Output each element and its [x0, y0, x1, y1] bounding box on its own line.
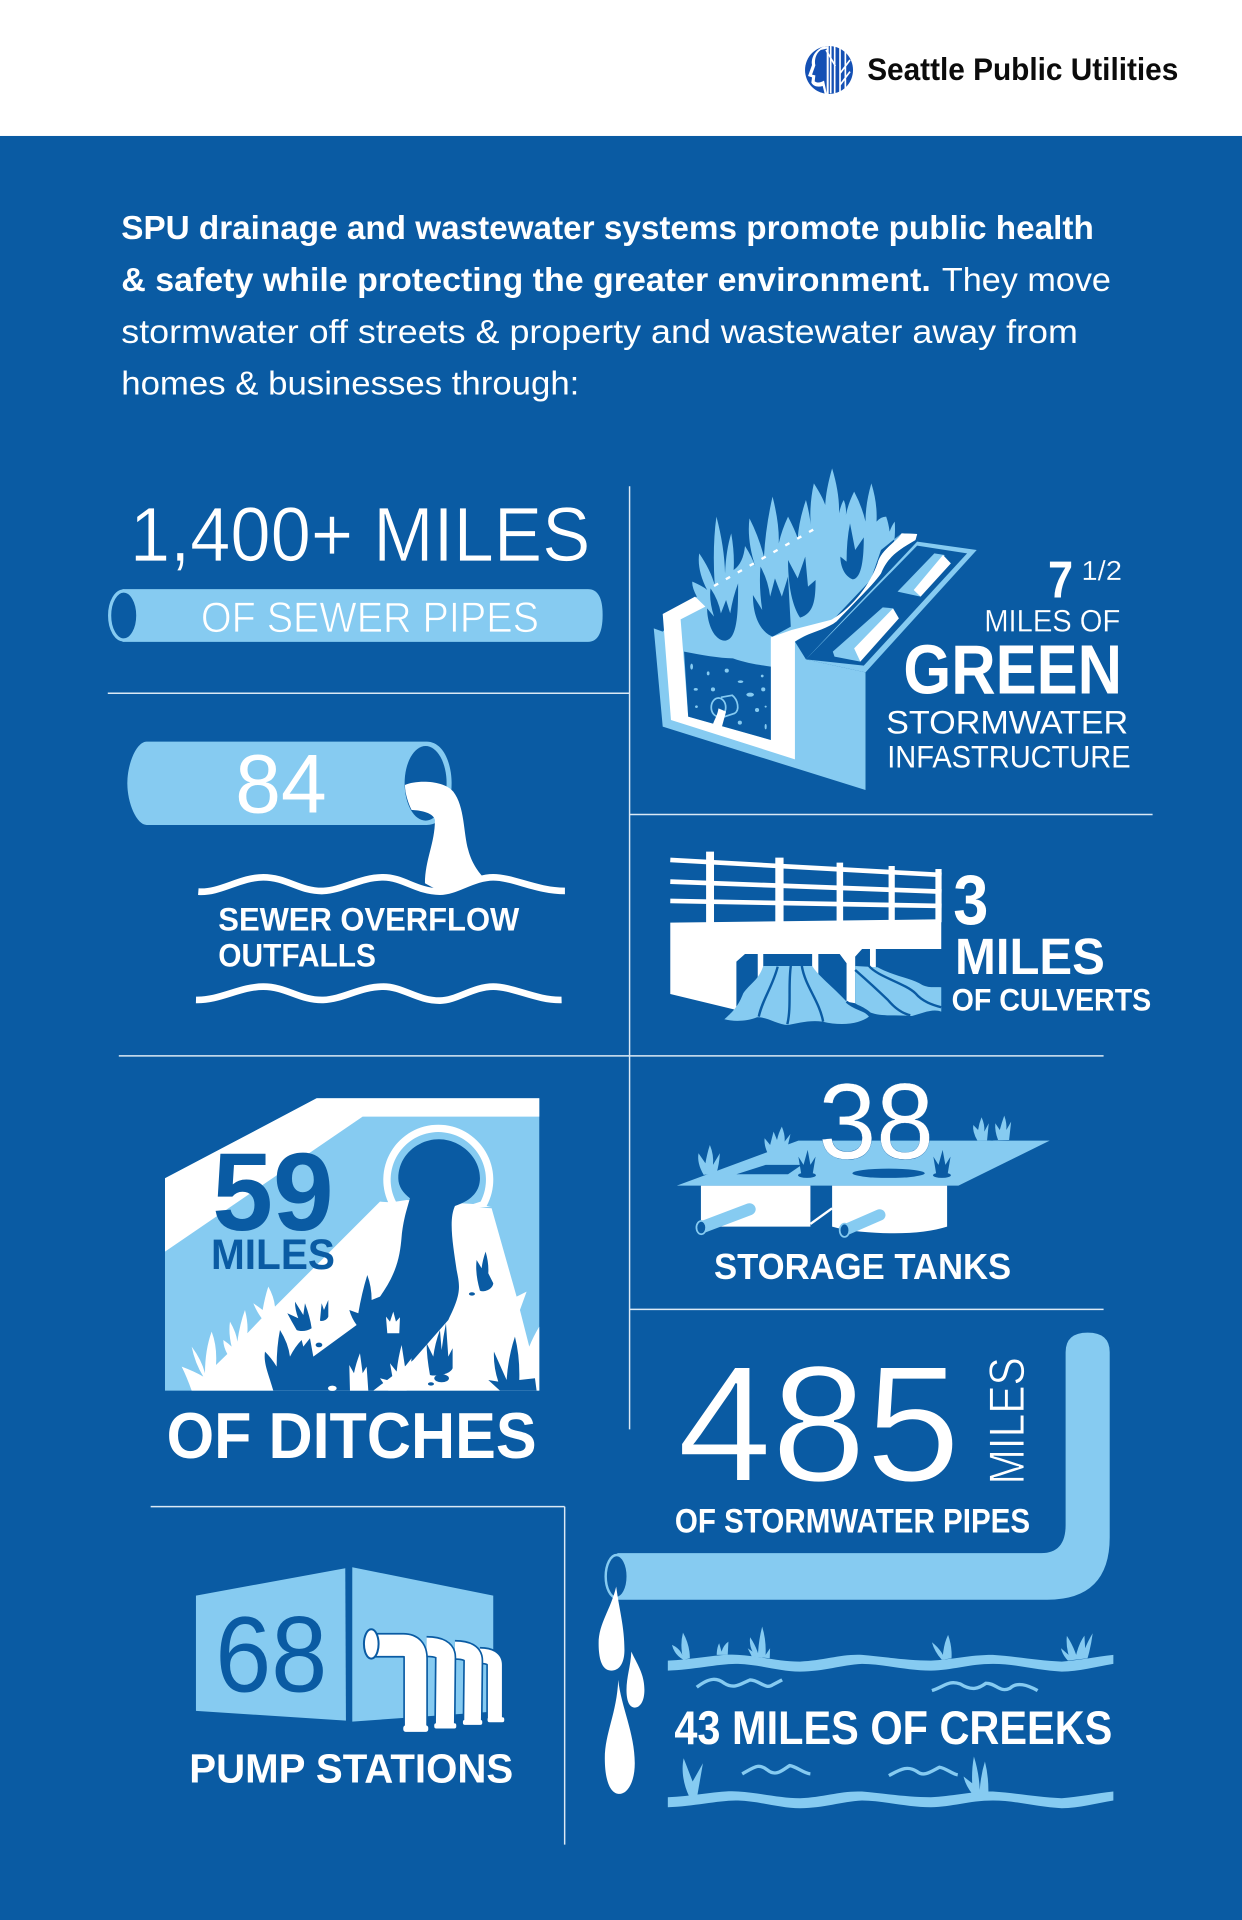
- icon: elbow stormwater pipe: [606, 1333, 1110, 1600]
- intro text: & safety while protecting the greater environment.: [121, 262, 931, 299]
- icon: Seattle seal: [805, 46, 853, 94]
- icon: bioswale cross-section: [654, 468, 977, 790]
- stat: 7 1/2: 7: [1048, 551, 1073, 609]
- panel: culverts and storage tanks: [670, 852, 1151, 1287]
- label: pump stations: PUMP STATIONS: [189, 1746, 513, 1792]
- icon: water drops: [599, 1587, 644, 1794]
- panel: sewer pipes: [110, 492, 603, 642]
- icon: lower creek bank: [668, 1757, 1113, 1808]
- label: 43 miles of creeks: 43 MILES OF CREEKS: [674, 1702, 1112, 1755]
- intro text: SPU drainage and wastewater systems promote public health: [121, 210, 1094, 247]
- pipe opening: [405, 746, 447, 821]
- label: of stormwater pipes: OF STORMWATER PIPES: [675, 1502, 1030, 1540]
- label: miles of: MILES OF: [984, 603, 1120, 639]
- label: sewer overflow outfalls: OUTFALLS: [218, 938, 376, 974]
- icon: pump station building: [196, 1567, 493, 1722]
- icon: upper creek bank: [668, 1627, 1113, 1691]
- stat: 7 1/2: 1/2: [1081, 555, 1122, 587]
- icon: ditch with culvert outfall: [165, 1098, 539, 1391]
- stat: 68: 68: [215, 1595, 327, 1715]
- intro text: They move: [942, 262, 1111, 299]
- icon: culvert bridge: [670, 852, 942, 1025]
- panel: pump stations: [189, 1567, 513, 1792]
- header logo: Seattle Public Utilities: [805, 46, 1178, 94]
- icon: pump pipes: [364, 1629, 504, 1732]
- stat: 3 miles of culverts: OF CULVERTS: [952, 982, 1151, 1018]
- panel: ditches: [165, 1098, 539, 1472]
- intro text: [121, 210, 1111, 402]
- intro text: stormwater off streets & property and wastewater away from: [121, 314, 1078, 351]
- icon: storage tanks: [677, 1116, 1050, 1237]
- heading: green: GREEN: [903, 631, 1122, 709]
- label: sewer overflow outfalls: SEWER OVERFLOW: [218, 902, 520, 938]
- stat: 3 miles of culverts: [952, 861, 1151, 1018]
- icon: water falling into waves: [198, 782, 565, 893]
- label: sewer overflow outfalls: [218, 902, 520, 974]
- label: miles, rotated: MILES: [979, 1357, 1035, 1485]
- stat: 1,400+ miles: 1,400+ MILES: [130, 492, 590, 578]
- panel: sewer overflow outfalls: [127, 738, 565, 1001]
- panel: stormwater pipes: [606, 1332, 1110, 1600]
- stat: 84: 84: [235, 738, 327, 831]
- label: infastructure: INFASTRUCTURE: [887, 739, 1131, 774]
- stat: 485: 485: [677, 1332, 960, 1517]
- stat: 59 miles: 59: [212, 1131, 334, 1254]
- icon: outfall pipe: [127, 742, 452, 825]
- intro text: homes & businesses through:: [121, 365, 579, 402]
- panel: creeks: [599, 1587, 1113, 1808]
- logo wordmark: Seattle Public Utilities: [867, 52, 1178, 87]
- icon: horizontal sewer pipe: [110, 589, 603, 642]
- stat: 3 miles of culverts: MILES: [955, 928, 1105, 985]
- label: storage tanks: STORAGE TANKS: [714, 1247, 1011, 1287]
- stat: 3 miles of culverts: 3: [953, 861, 988, 940]
- stat: 59 miles: MILES: [211, 1231, 335, 1279]
- label: stormwater: STORMWATER: [886, 705, 1128, 741]
- stat: 7 1/2: [1048, 551, 1122, 609]
- panel: green stormwater infrastructure: [654, 468, 1131, 790]
- icon: lower wave: [196, 987, 562, 1001]
- stat: 38: 38: [818, 1062, 934, 1182]
- label: of ditches: OF DITCHES: [167, 1399, 537, 1472]
- label: of sewer pipes: OF SEWER PIPES: [201, 594, 539, 642]
